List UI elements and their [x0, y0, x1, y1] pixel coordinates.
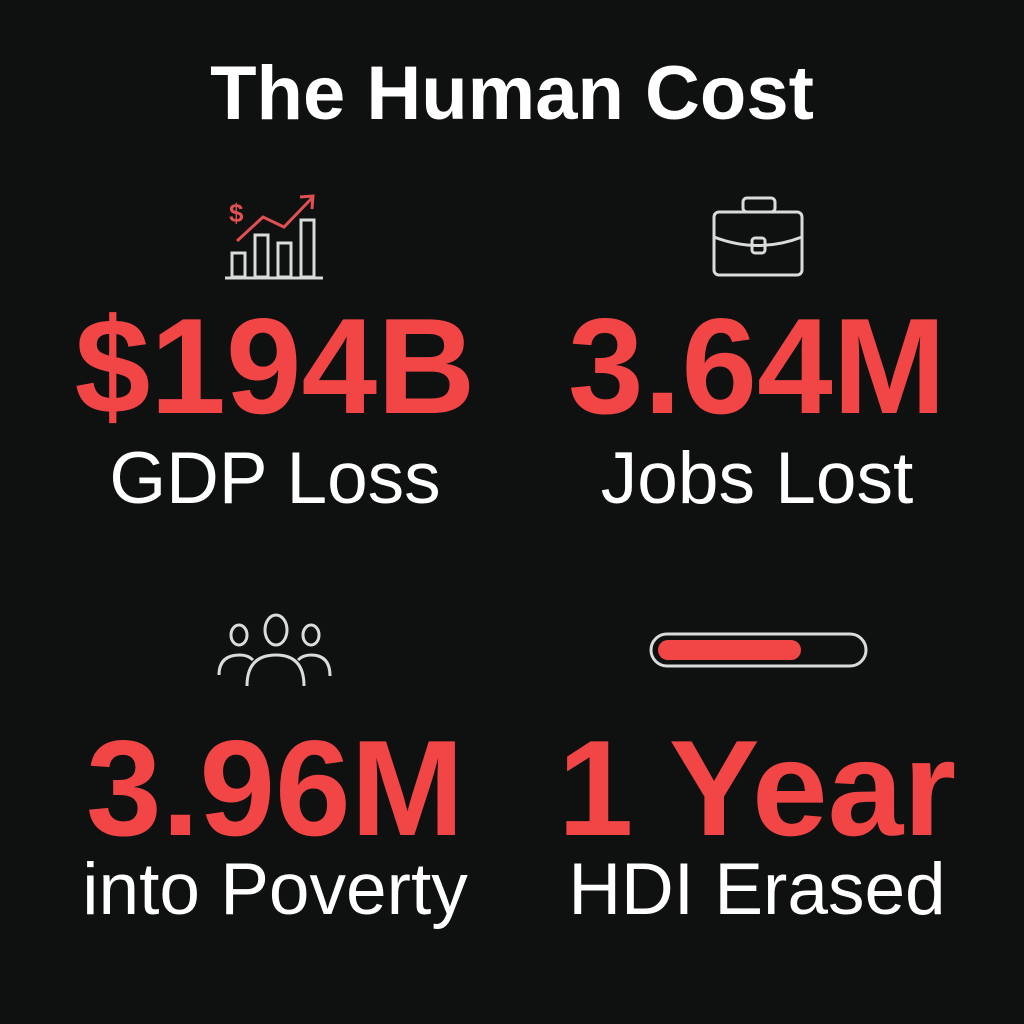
- icon: people: [218, 614, 332, 686]
- icon: chart: $: [229, 198, 244, 228]
- text: HDI Erased: [568, 849, 946, 930]
- stat: poverty: 3.96M: [86, 712, 464, 864]
- stat: HDI: 1 Year: [558, 712, 956, 864]
- icon: chart: [225, 194, 323, 280]
- icon: briefcase: [712, 196, 804, 276]
- icon: progress bar: [650, 632, 868, 668]
- stat: GDP loss: $194B: [75, 290, 475, 442]
- text: GDP Loss: [109, 438, 441, 519]
- text: into Poverty: [82, 849, 468, 930]
- text: Jobs Lost: [601, 438, 913, 519]
- title: The Human Cost: [210, 51, 814, 136]
- stat: jobs lost: 3.64M: [568, 290, 946, 442]
